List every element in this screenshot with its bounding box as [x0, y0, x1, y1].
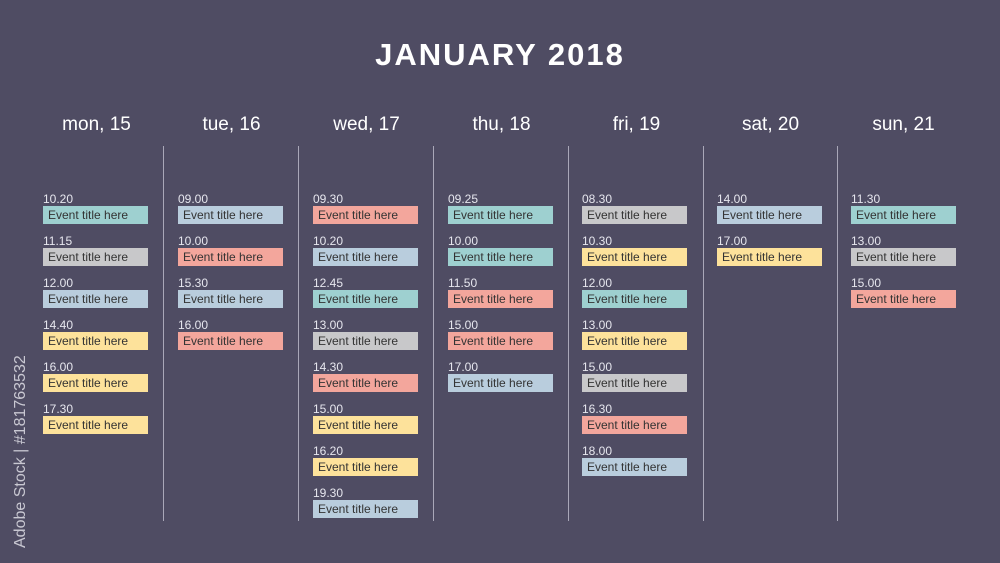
column: fri events: 12.00 — [582, 276, 612, 290]
column: mon events: Event title here — [48, 292, 128, 306]
column: thu events: Event title here — [453, 208, 533, 222]
column: fri events: Event title here — [587, 292, 667, 306]
column: tue events: 16.00 — [178, 318, 208, 332]
day header: sun: sun, 21 — [872, 114, 935, 135]
column: mon events: 17.30 — [43, 402, 73, 416]
column: fri events: Event title here — [587, 334, 667, 348]
column: wed events: Event title here — [318, 208, 398, 222]
column: sat events: Event title here — [722, 208, 802, 222]
column: fri events: 10.30 — [582, 234, 612, 248]
column: sat events: 17.00 — [717, 234, 747, 248]
column: tue events: Event title here — [183, 334, 263, 348]
column: tue events — [178, 192, 283, 350]
column: mon events: 10.20 — [43, 192, 73, 206]
column: fri events: 08.30 — [582, 192, 612, 206]
column: thu events: Event title here — [453, 334, 533, 348]
column: tue events: 09.00 — [178, 192, 208, 206]
column: mon events: Event title here — [48, 418, 128, 432]
watermark text: Adobe Stock | #181763532 — [12, 355, 29, 548]
column: mon events: 14.40 — [43, 318, 73, 332]
day header: wed: wed, 17 — [333, 114, 400, 135]
day header: fri: fri, 19 — [613, 114, 660, 135]
column: wed events: 19.30 — [313, 486, 343, 500]
column: fri events: 13.00 — [582, 318, 612, 332]
column: fri events: Event title here — [587, 460, 667, 474]
column: wed events: Event title here — [318, 292, 398, 306]
column: wed events: 14.30 — [313, 360, 343, 374]
column: wed events: 15.00 — [313, 402, 343, 416]
column: wed events: 10.20 — [313, 234, 343, 248]
column: sat events: Event title here — [722, 250, 802, 264]
column: thu events: 11.50 — [448, 276, 477, 290]
column: thu events: Event title here — [453, 376, 533, 390]
column: mon events: 16.00 — [43, 360, 73, 374]
column: tue events: Event title here — [183, 208, 263, 222]
title: JANUARY 2018 — [375, 37, 625, 72]
column: wed events: Event title here — [318, 418, 398, 432]
column: mon events — [43, 192, 148, 434]
column: sun events: 11.30 — [851, 192, 880, 206]
column: thu events — [448, 192, 553, 392]
column: fri events: Event title here — [587, 208, 667, 222]
column: mon events: Event title here — [48, 208, 128, 222]
column: wed events: 09.30 — [313, 192, 343, 206]
column: thu events: 17.00 — [448, 360, 478, 374]
column: fri events — [582, 192, 687, 476]
column: sat events: 14.00 — [717, 192, 747, 206]
column: sun events: Event title here — [856, 208, 936, 222]
column: wed events: Event title here — [318, 376, 398, 390]
column: sun events: Event title here — [856, 292, 936, 306]
column: wed events: Event title here — [318, 250, 398, 264]
column: tue events: Event title here — [183, 250, 263, 264]
column: fri events: Event title here — [587, 418, 667, 432]
day header: thu: thu, 18 — [472, 114, 531, 135]
column: wed events: Event title here — [318, 334, 398, 348]
column: mon events: 11.15 — [43, 234, 72, 248]
column: sun events: Event title here — [856, 250, 936, 264]
column: wed events — [313, 192, 418, 518]
column: mon events: 12.00 — [43, 276, 73, 290]
column: mon events: Event title here — [48, 376, 128, 390]
column: wed events: Event title here — [318, 460, 398, 474]
column: mon events: Event title here — [48, 334, 128, 348]
column: thu events: 15.00 — [448, 318, 478, 332]
column: wed events: 12.45 — [313, 276, 343, 290]
day header: mon: mon, 15 — [62, 114, 131, 135]
column: sun events: 15.00 — [851, 276, 881, 290]
column: sun events — [851, 192, 956, 308]
column: tue events: 15.30 — [178, 276, 208, 290]
column: fri events: 15.00 — [582, 360, 612, 374]
column: thu events: 10.00 — [448, 234, 478, 248]
column: fri events: Event title here — [587, 376, 667, 390]
column: tue events: 10.00 — [178, 234, 208, 248]
day header: sat: sat, 20 — [742, 114, 799, 135]
column: thu events: Event title here — [453, 250, 533, 264]
column: thu events: Event title here — [453, 292, 533, 306]
column: fri events: Event title here — [587, 250, 667, 264]
column: wed events: 13.00 — [313, 318, 343, 332]
column: mon events: Event title here — [48, 250, 128, 264]
column: tue events: Event title here — [183, 292, 263, 306]
column: wed events: 16.20 — [313, 444, 343, 458]
column: fri events: 16.30 — [582, 402, 612, 416]
day header: tue: tue, 16 — [202, 114, 261, 135]
column: thu events: 09.25 — [448, 192, 478, 206]
column: wed events: Event title here — [318, 502, 398, 516]
column: sun events: 13.00 — [851, 234, 881, 248]
column: fri events: 18.00 — [582, 444, 612, 458]
column: sat events — [717, 192, 822, 266]
